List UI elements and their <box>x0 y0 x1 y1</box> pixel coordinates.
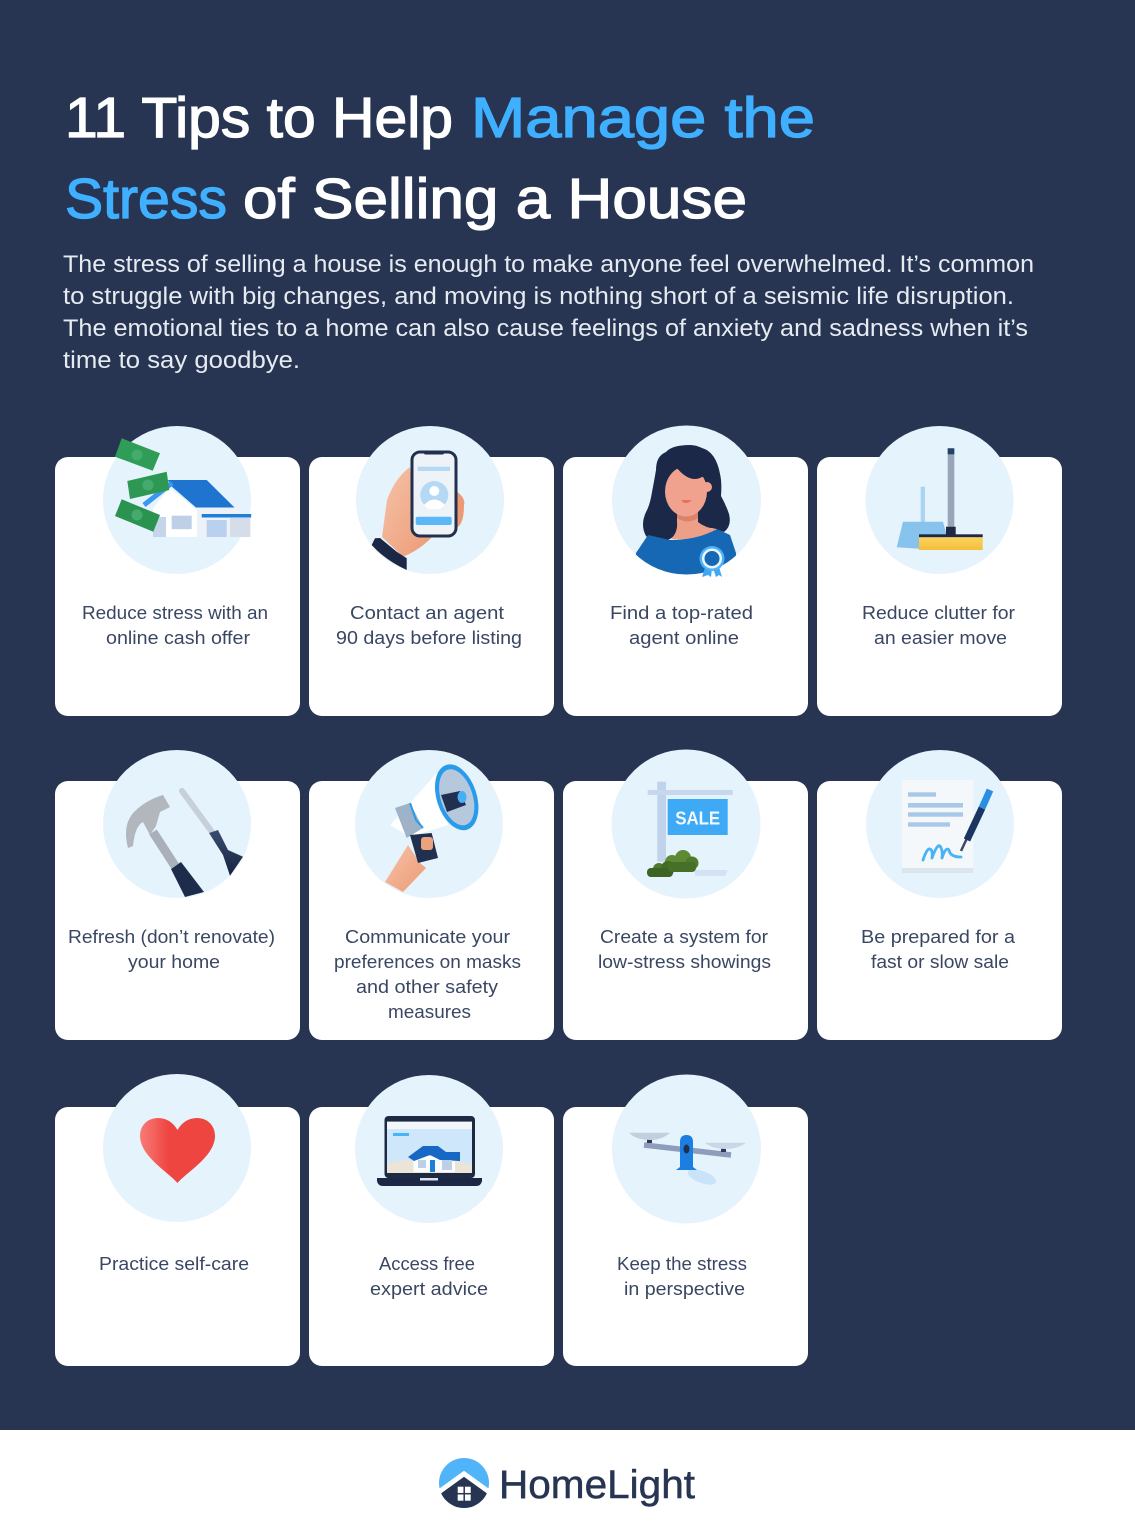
card 6: communicate <box>309 750 554 1040</box>
label <box>617 1253 747 1299</box>
label: in perspective <box>624 1278 745 1299</box>
label: Communicate your <box>345 926 510 947</box>
title: Stress <box>65 167 227 231</box>
intro text: The stress of selling a house is enough to make anyone feel overwhelmed. It’s common <box>63 251 1034 278</box>
card 3: top-rated agent <box>563 426 808 716</box>
label: Reduce stress with an <box>82 602 268 623</box>
title <box>65 86 815 231</box>
icon: signed document and pen <box>902 780 990 873</box>
icon: house and cash <box>115 438 251 537</box>
icon: woman with ribbon <box>636 445 736 590</box>
label <box>370 1253 488 1299</box>
label: Practice self-care <box>99 1253 249 1274</box>
label: fast or slow sale <box>871 951 1009 972</box>
icon: megaphone in hand <box>385 759 486 892</box>
label <box>861 926 1016 972</box>
label <box>68 926 275 972</box>
card 7: showings <box>563 750 808 1040</box>
label: Access free <box>379 1253 475 1274</box>
icon: for sale sign: SALE <box>675 808 720 828</box>
label: Refresh (don’t renovate) <box>68 926 275 947</box>
icon: laptop <box>377 1116 482 1186</box>
title: 11 Tips to Help <box>65 86 453 150</box>
label <box>336 602 522 648</box>
label <box>598 926 771 972</box>
label: Create a system for <box>600 926 768 947</box>
label <box>610 602 753 648</box>
label <box>334 926 521 1022</box>
HomeLight logo <box>436 1458 695 1508</box>
card 10: expert advice <box>309 1075 554 1366</box>
card 8: fast or slow sale <box>817 750 1062 1040</box>
card 11: perspective <box>563 1074 808 1366</box>
label <box>862 602 1015 648</box>
label: expert advice <box>370 1278 488 1299</box>
icon: heart <box>140 1118 215 1183</box>
label: Keep the stress <box>617 1253 747 1274</box>
label <box>82 602 268 648</box>
icon: hammer and screwdriver <box>126 791 243 897</box>
intro text: to struggle with big changes, and moving is nothing short of a seismic life disruption. <box>63 283 1014 310</box>
label: Reduce clutter for <box>862 602 1015 623</box>
icon: balance scale seesaw <box>629 1133 746 1188</box>
label: an easier move <box>874 627 1007 648</box>
card 9: self-care <box>55 1074 300 1366</box>
card 5: refresh <box>55 750 300 1040</box>
card 2: contact an agent <box>309 426 554 716</box>
footer band <box>0 1430 1135 1536</box>
label: Contact an agent <box>350 602 504 623</box>
card 1: cash offer <box>55 426 300 716</box>
title: Manage the <box>471 86 815 150</box>
label: your home <box>128 951 220 972</box>
label: Be prepared for a <box>861 926 1016 947</box>
title: of Selling a House <box>243 167 747 231</box>
icon: broom and dustpan <box>897 448 983 550</box>
label: and other safety <box>356 976 499 997</box>
intro text: The emotional ties to a home can also cause feelings of anxiety and sadness when it’s <box>63 315 1028 342</box>
label: preferences on masks <box>334 951 521 972</box>
intro text: time to say goodbye. <box>63 347 300 374</box>
icon: hand holding phone <box>372 451 464 570</box>
label: low-stress showings <box>598 951 771 972</box>
label: agent online <box>629 627 739 648</box>
icon: house logo mark <box>439 1458 489 1508</box>
intro text <box>63 251 1034 374</box>
icon: for sale sign <box>647 782 733 877</box>
label: 90 days before listing <box>336 627 522 648</box>
wordmark: HomeLight <box>499 1463 695 1507</box>
label: online cash offer <box>106 627 250 648</box>
label: Find a top-rated <box>610 602 753 623</box>
card 4: reduce clutter <box>817 426 1062 716</box>
label: measures <box>388 1001 471 1022</box>
